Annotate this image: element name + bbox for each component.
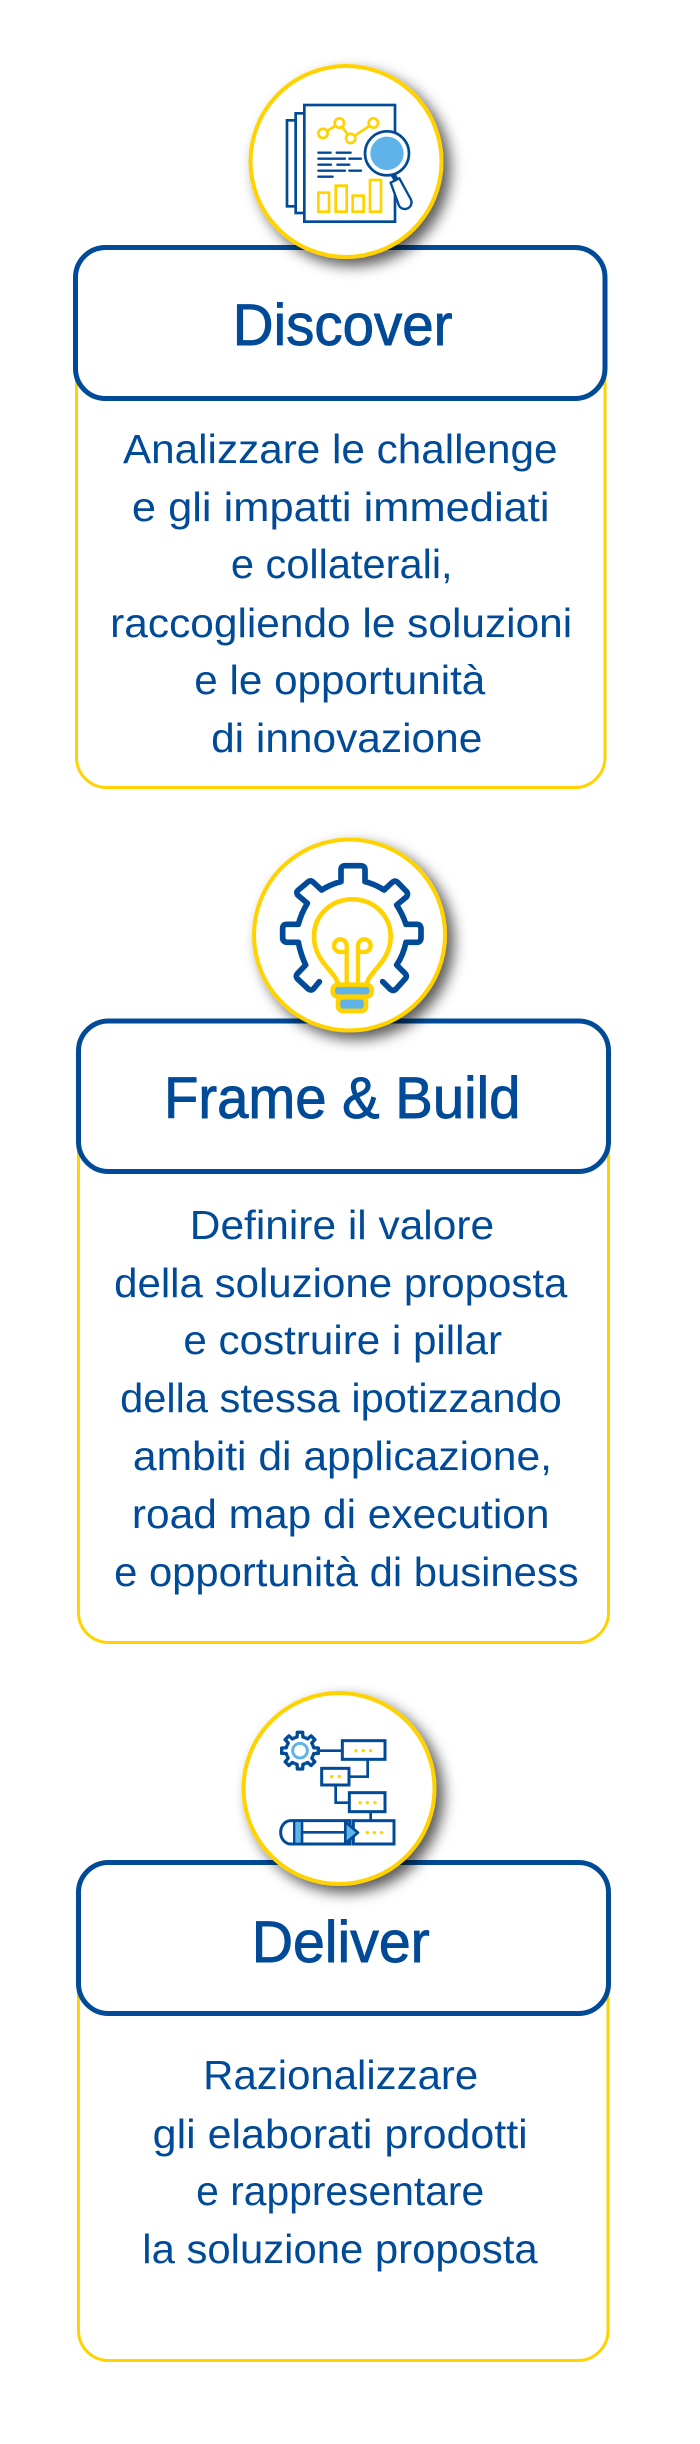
discover body box bbox=[76, 320, 605, 788]
discover icon badge bbox=[250, 66, 442, 257]
deliver description: la soluzione proposta bbox=[142, 2226, 538, 2272]
icon: gear with light bulb bbox=[283, 866, 421, 1011]
discover description: di innovazione bbox=[211, 715, 482, 761]
frame and build description bbox=[114, 1202, 579, 1595]
frame and build description: road map di execution bbox=[132, 1491, 550, 1537]
frame and build header box bbox=[78, 1021, 608, 1172]
frame and build description: della soluzione proposta bbox=[114, 1260, 568, 1306]
deliver body box bbox=[78, 1930, 608, 2360]
frame and build description: e costruire i pillar bbox=[183, 1317, 502, 1363]
discover description bbox=[110, 426, 572, 761]
discover heading: Discover bbox=[233, 293, 452, 358]
deliver description: gli elaborati prodotti bbox=[153, 2111, 528, 2157]
frame and build icon badge bbox=[254, 840, 445, 1030]
deliver description: e rappresentare bbox=[196, 2168, 484, 2214]
icon: report with magnifier bbox=[287, 105, 412, 222]
discover description: Analizzare le challenge bbox=[123, 426, 558, 472]
discover description: e le opportunità bbox=[194, 657, 486, 703]
frame and build description: e opportunità di business bbox=[114, 1549, 579, 1595]
frame and build description: della stessa ipotizzando bbox=[120, 1375, 562, 1421]
frame and build description: Definire il valore bbox=[190, 1202, 494, 1248]
icon: workflow with gear and pencil bbox=[281, 1732, 394, 1844]
deliver heading: Deliver bbox=[252, 1910, 430, 1975]
discover description: e gli impatti immediati bbox=[132, 484, 550, 530]
frame and build description: ambiti di applicazione, bbox=[133, 1433, 552, 1479]
frame and build body box bbox=[78, 1090, 608, 1642]
panel: discover bbox=[76, 66, 605, 788]
deliver header box bbox=[78, 1862, 608, 2014]
discover description: e collaterali, bbox=[231, 541, 453, 587]
deliver description bbox=[142, 2052, 538, 2272]
deliver description: Razionalizzare bbox=[203, 2052, 478, 2098]
frame and build heading: Frame & Build bbox=[164, 1066, 520, 1131]
panel: deliver bbox=[78, 1693, 608, 2360]
discover header box bbox=[76, 248, 605, 398]
deliver icon badge bbox=[244, 1693, 434, 1884]
discover description: raccogliendo le soluzioni bbox=[110, 600, 572, 646]
panel: frame and build bbox=[78, 840, 608, 1642]
